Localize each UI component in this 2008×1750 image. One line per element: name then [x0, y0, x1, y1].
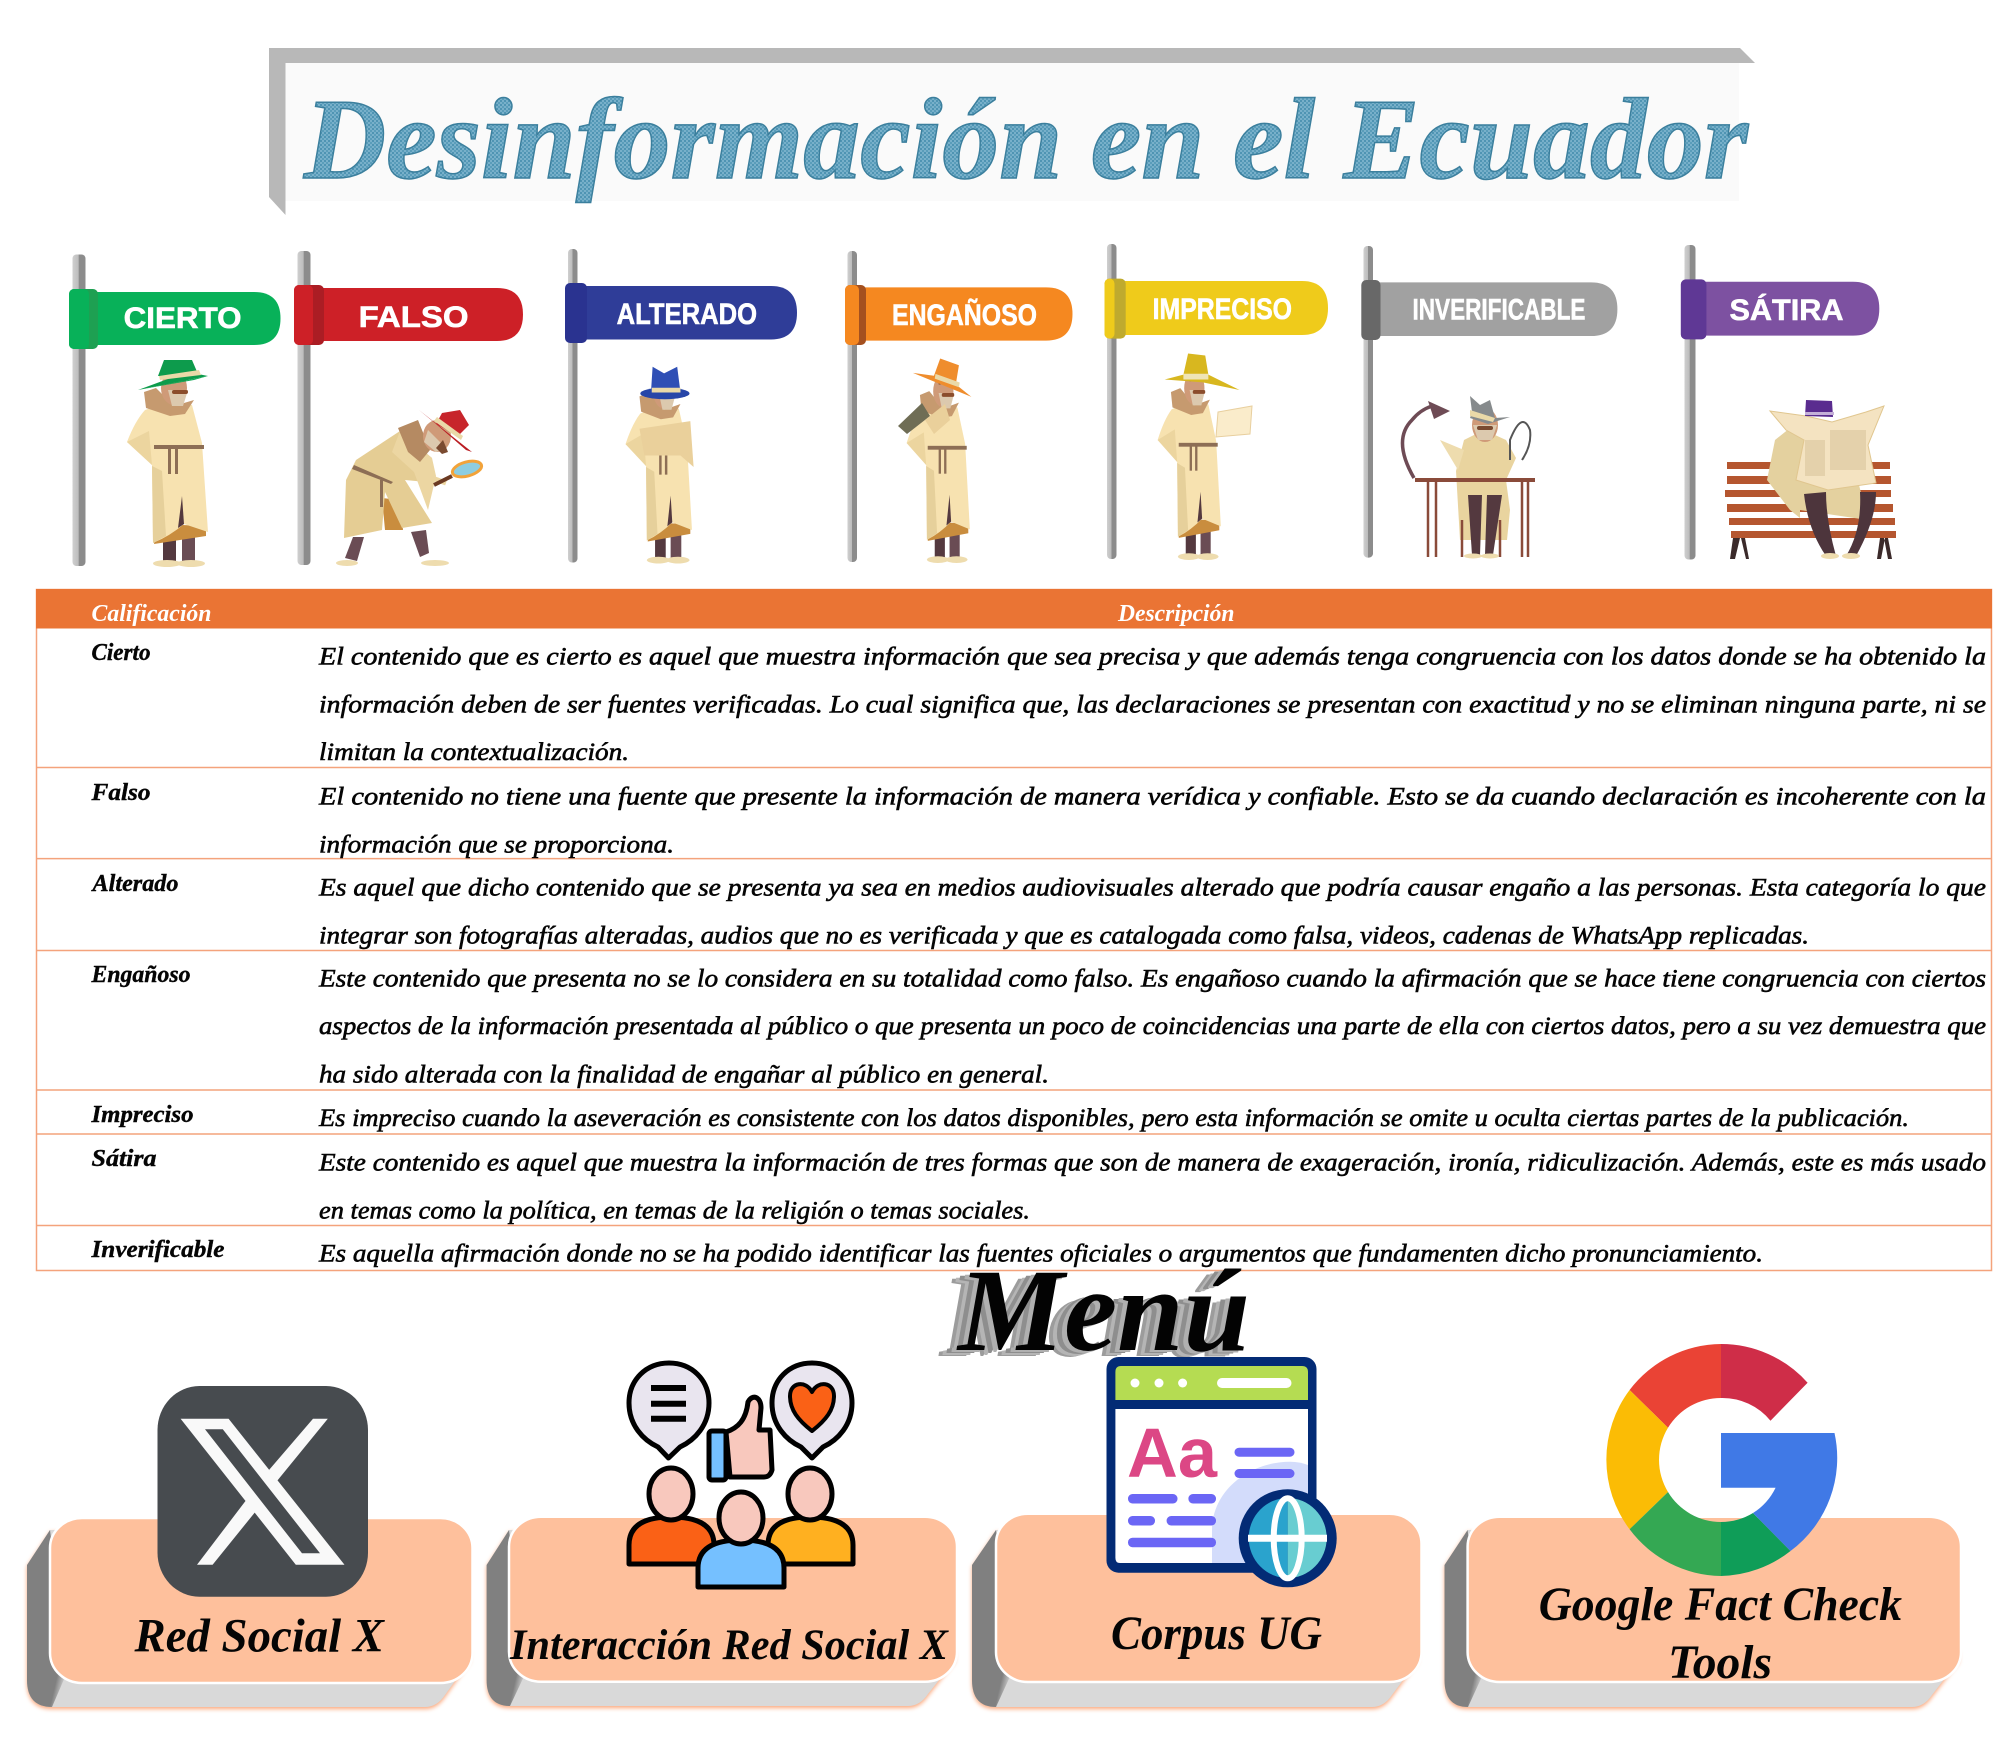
sign: IMPRECISO: IMPRECISO: [1153, 293, 1292, 326]
row: Sátira: Sátira: [92, 1146, 156, 1172]
table header: Descripción: [1117, 601, 1234, 627]
row: Cierto: información deben de ser fuentes verificadas. Lo cual significa que, las declaraciones se presentan con exactitud y no se eliminan ninguna parte, ni se: [319, 692, 1986, 718]
detective: blue hat: [626, 367, 694, 563]
row: Falso: El contenido no tiene una fuente que presente la información de manera verídica y confiable. Esto se da cuando declaración es incoherente con la: [318, 784, 1986, 810]
card: Google Fact Check Tools: Tools: [1668, 1636, 1772, 1689]
heading: Menú: Menú: [942, 1250, 1236, 1381]
row: Cierto: limitan la contextualización.: [319, 739, 629, 766]
heading: Menú: Menú: [946, 1248, 1240, 1379]
sign: INVERIFICABLE: [1361, 246, 1617, 558]
card: Red Social X: [27, 1518, 472, 1707]
detective: grey hat at desk with lamp: [1402, 396, 1535, 558]
detective: green hat: [127, 360, 208, 567]
row: Inverificable: Inverificable: [90, 1237, 225, 1263]
row: Alterado: [90, 871, 1986, 950]
icon: Corpus window: Aa: [1127, 1414, 1218, 1492]
row: Falso: información que se proporciona.: [319, 832, 674, 858]
card: Google Fact Check Tools: Google Fact Check: [1539, 1578, 1902, 1631]
title panel: [269, 48, 1755, 215]
card: Interacción Red Social X: Interacción Red Social X: [509, 1622, 949, 1669]
row: Engañoso: Engañoso: [91, 962, 190, 988]
row: Alterado: Es aquel que dicho contenido que se presenta ya sea en medios audiovisuales alterado que podría causar engaño a las personas. Esta categoría lo que: [318, 874, 1986, 902]
icon: social interaction: [629, 1363, 853, 1587]
sign: SÁTIRA: SÁTIRA: [1730, 293, 1844, 327]
row: Sátira: [92, 1146, 1986, 1224]
sign: IMPRECISO: [1104, 244, 1328, 559]
icon: X logo: [158, 1386, 368, 1597]
row: Inverificable: Es aquella afirmación donde no se ha podido identificar las fuentes oficiales o argumentos que fundamenten dicho pronunciamiento.: [318, 1240, 1763, 1268]
icon: Corpus window: [1106, 1357, 1337, 1587]
card: Google Fact Check Tools: [1444, 1517, 1961, 1707]
sign: ENGAÑOSO: ENGAÑOSO: [892, 298, 1037, 332]
sign: ALTERADO: [565, 249, 797, 562]
card: Red Social X: Red Social X: [134, 1610, 385, 1663]
heading: Menú: Menú: [938, 1251, 1232, 1382]
detective: yellow hat with tablet: [1158, 354, 1252, 560]
row: Sátira: Este contenido es aquel que muestra la información de tres formas que son de manera de exageración, ironía, ridiculización. Además, este es más usado: [318, 1150, 1986, 1176]
sign: FALSO: FALSO: [359, 301, 469, 334]
table: [36, 589, 1992, 1270]
row: Impreciso: Impreciso: [90, 1102, 194, 1128]
row: Alterado: integrar son fotografías alteradas, audios que no es verificada y que es catalogada como falsa, videos, cadenas de WhatsApp replicadas.: [319, 922, 1809, 950]
row: Cierto: [92, 640, 1986, 766]
sign: CIERTO: [69, 254, 280, 566]
row: Sátira: en temas como la política, en temas de la religión o temas sociales.: [319, 1198, 1030, 1224]
sign: FALSO: [294, 251, 523, 565]
row: Alterado: Alterado: [90, 871, 178, 897]
detective: orange hat with binoculars: [898, 358, 971, 563]
sign: ALTERADO: ALTERADO: [617, 298, 757, 331]
row: Impreciso: Es impreciso cuando la aseveración es consistente con los datos disponibles, pero esta información se omite u oculta ciertas partes de la publicación.: [318, 1105, 1909, 1132]
detective: red hat with magnifier: [336, 410, 483, 566]
sign: ENGAÑOSO: [845, 251, 1072, 562]
row: Engañoso: aspectos de la información presentada al público o que presenta un poco de coincidencias una parte de ella con ciertos datos, pero a su vez demuestra que: [319, 1013, 1986, 1040]
table header: [36, 589, 1992, 628]
heading: Menú: Menú: [956, 1245, 1250, 1376]
heading: Menú: Menú: [951, 1247, 1245, 1378]
title: Desinformación en el Ecuador: [303, 76, 1749, 204]
sign: SÁTIRA: [1681, 245, 1879, 560]
row: Cierto: El contenido que es cierto es aquel que muestra información que sea precisa y que además tenga congruencia con los datos donde se ha obtenido la: [318, 644, 1986, 670]
card: Corpus UG: Corpus UG: [1111, 1607, 1322, 1660]
sign: CIERTO: CIERTO: [124, 302, 242, 335]
row: Engañoso: [91, 962, 1986, 1088]
row: Falso: [90, 780, 1986, 858]
card: Corpus UG: [972, 1514, 1422, 1707]
icon: Google G: [1606, 1344, 1837, 1576]
row: Engañoso: Este contenido que presenta no se lo considera en su totalidad como falso. Es engañoso cuando la afirmación que se hace tiene congruencia con ciertos: [318, 966, 1986, 992]
detective: purple hat reading on bench: [1725, 400, 1896, 559]
sign: INVERIFICABLE: INVERIFICABLE: [1412, 294, 1585, 326]
row: Cierto: Cierto: [92, 640, 150, 666]
row: Engañoso: ha sido alterada con la finalidad de engañar al público en general.: [319, 1062, 1049, 1088]
table header: Calificación: [92, 601, 212, 627]
row: Falso: Falso: [90, 780, 150, 806]
card: Interacción Red Social X: [487, 1517, 957, 1706]
